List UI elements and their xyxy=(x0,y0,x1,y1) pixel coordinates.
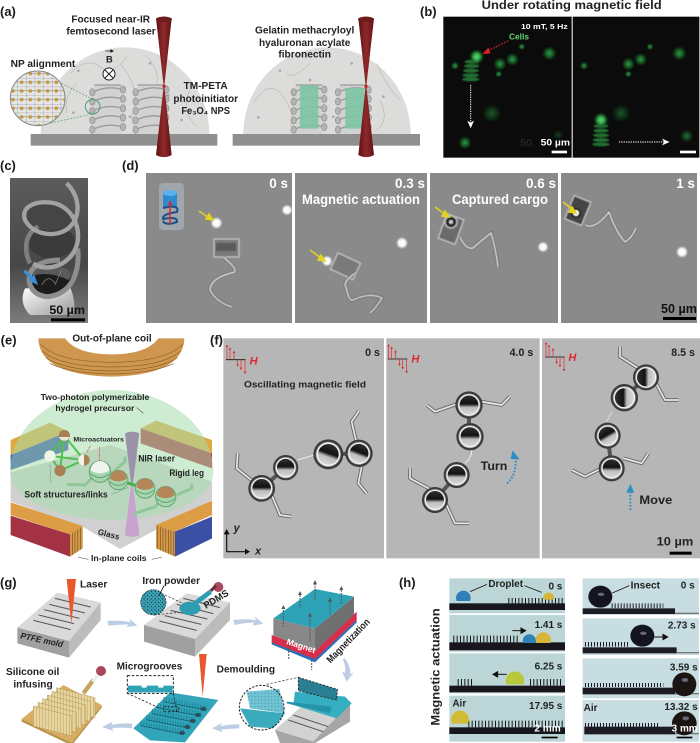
flow arrow 2 xyxy=(233,616,263,626)
microgrooved plate xyxy=(133,692,218,742)
glass slide xyxy=(11,445,212,549)
PTFE mold label: PTFE mold xyxy=(20,631,65,649)
fluorescence frame 1 xyxy=(443,17,572,158)
white direction arrow down xyxy=(467,85,474,128)
panel: (g) fabrication of microgroove surface xyxy=(0,575,373,743)
xy axes: y xyxy=(233,523,241,535)
right base plate xyxy=(233,134,420,146)
microgrooves label: Microgrooves xyxy=(117,661,183,672)
captured cargo caption: Captured cargo xyxy=(452,192,548,207)
panel label g: (g) xyxy=(0,575,17,590)
frame 0.3 s xyxy=(295,173,427,323)
insect frame 2 xyxy=(583,618,699,655)
frame 1 s xyxy=(561,173,697,323)
hydrogel composition caption: fibronectin xyxy=(278,50,331,61)
time stamps insect: 13.32 s xyxy=(664,702,698,713)
scale label: 50 µm xyxy=(661,301,697,316)
panel label d: (d) xyxy=(122,158,139,173)
frame 0 s xyxy=(223,338,384,558)
white direction arrow right xyxy=(619,139,670,145)
time stamps xyxy=(269,176,695,191)
microactuators label: Microactuators xyxy=(73,437,124,444)
panel: (f) micrographs under oscillating field xyxy=(210,333,700,558)
scale labels: 2 mm xyxy=(534,724,561,735)
in-plane coil back-right xyxy=(141,421,212,468)
second mold block xyxy=(144,593,230,657)
laser beam, first stage xyxy=(156,17,172,157)
droplet frame 3 xyxy=(449,653,565,693)
scale bar xyxy=(670,552,692,555)
green hydrogel precursor dome xyxy=(10,390,213,520)
scale bar xyxy=(51,318,85,321)
scale labels xyxy=(534,724,698,735)
helix inset icon xyxy=(159,183,184,230)
second laser cone xyxy=(199,654,207,697)
helical scaffolds with cell-laden hydrogel xyxy=(291,85,371,134)
move arrow xyxy=(626,484,634,510)
rigid legs xyxy=(67,457,192,514)
hydrogel composition caption xyxy=(255,25,355,61)
magnetic actuation caption: Magnetic actuation xyxy=(302,192,420,207)
hydrogel label: Two-photon polymerizable xyxy=(41,392,150,402)
time stamps: 0 s xyxy=(365,347,380,359)
scale label: 10 µm xyxy=(657,535,693,548)
helical scaffolds, first stage xyxy=(90,85,169,134)
time stamps: 0.6 s xyxy=(526,176,556,191)
time stamps droplet: 6.25 s xyxy=(535,662,563,673)
laser caption: femtosecond laser xyxy=(66,27,156,38)
xy axes xyxy=(224,523,262,557)
scale label: 50 µm xyxy=(49,303,85,317)
hydrogel composition caption: hyaluronan acylate xyxy=(259,38,351,49)
scale labels xyxy=(520,138,570,150)
arrowheads xyxy=(281,580,343,617)
scale bar 2 xyxy=(680,151,696,153)
time stamps insect xyxy=(664,581,698,713)
panel label h: (h) xyxy=(399,575,416,590)
panel label c: (c) xyxy=(0,158,16,173)
tetrahedral soft structure xyxy=(44,430,90,476)
scale bar 1 xyxy=(552,151,567,153)
NIR laser cone xyxy=(125,432,139,537)
in-plane coils label: In-plane coils xyxy=(91,553,147,563)
time stamps: 0.3 s xyxy=(395,176,425,191)
in-plane coil back-left xyxy=(11,423,68,470)
panel: (a) laser fabrication of helical scaffolds xyxy=(0,4,420,157)
time stamps: 8.5 s xyxy=(671,347,695,359)
red arrow to cells xyxy=(482,41,508,54)
silicone oil label: infusing xyxy=(13,679,53,690)
time stamps: 4.0 s xyxy=(510,347,533,359)
fluorescence frame 2 xyxy=(573,17,699,158)
insect frame 4 xyxy=(583,700,699,742)
hydrogel composition caption: Gelatin methacryloyl xyxy=(255,25,355,36)
frame 8.5 s xyxy=(542,338,700,558)
side title: Magnetic actuation xyxy=(428,608,442,726)
demoulding block xyxy=(275,677,352,743)
out-of-plane coil xyxy=(38,338,184,377)
scale bars xyxy=(542,737,692,738)
droplet frame 4 xyxy=(449,696,565,742)
laser caption xyxy=(66,15,156,38)
time stamps droplet: 1.41 s xyxy=(535,620,563,631)
insect frame 3 xyxy=(583,658,699,698)
droplet label with pointers xyxy=(470,579,542,592)
panel: (c) SEM image of helix xyxy=(0,158,88,323)
laser cone xyxy=(67,579,76,623)
frame 4.0 s xyxy=(386,338,540,558)
laser label: Laser xyxy=(80,580,107,591)
field symbols H: H xyxy=(568,352,577,364)
microgroove section inset xyxy=(127,676,178,712)
time stamps xyxy=(365,347,695,359)
demoulding label: Demoulding xyxy=(217,665,275,676)
cells label: Cells xyxy=(509,31,529,41)
panel label a: (a) xyxy=(0,4,16,19)
panel: (d) magnetic actuation and cargo capture xyxy=(122,158,697,323)
left hydrogel dome xyxy=(41,47,209,134)
scale labels: 50 xyxy=(520,138,532,150)
field symbols H xyxy=(226,342,577,374)
laser caption: Focused near-IR xyxy=(71,15,150,26)
laser beam, second stage xyxy=(358,17,374,157)
insect label with pointer xyxy=(612,581,661,593)
magnetic field symbol: B xyxy=(106,55,113,65)
air labels: Air xyxy=(452,698,466,709)
turn arrow xyxy=(507,450,520,483)
droplet frame 1 xyxy=(449,578,565,613)
turn label: Turn xyxy=(481,459,507,473)
xy axes: x xyxy=(254,545,262,557)
panel label f: (f) xyxy=(210,333,223,348)
move label: Move xyxy=(639,493,673,507)
silicone oil dropper xyxy=(83,666,106,693)
SEM image xyxy=(10,178,88,323)
magnetic field symbol xyxy=(103,50,115,80)
oscillating field caption: Oscillating magnetic field xyxy=(244,379,366,389)
iron powder inset xyxy=(141,586,187,615)
red dashed arrows xyxy=(87,446,99,461)
frame 0.6 s xyxy=(430,173,558,323)
yellow arrows to cargo xyxy=(199,202,576,261)
hydrogel label xyxy=(41,392,150,413)
field symbols H: H xyxy=(250,356,259,368)
material label xyxy=(173,81,238,117)
magnetization block xyxy=(272,589,357,662)
material label: TM-PETA xyxy=(184,81,228,92)
soft structures label: Soft structures/links xyxy=(24,489,108,499)
time stamps: 1 s xyxy=(676,176,695,191)
hydrogel label: hydrogel precursor xyxy=(55,403,135,413)
PTFE mold block xyxy=(17,593,101,658)
silicone oil label: Silicone oil xyxy=(6,667,60,678)
in-plane coil front-right xyxy=(156,501,212,557)
scale bar xyxy=(663,317,696,320)
silicone oil label xyxy=(6,667,60,690)
flow arrow 5 xyxy=(102,722,132,731)
lubricated fin structure xyxy=(22,685,102,743)
flow arrow 3 xyxy=(342,658,354,682)
insect label with pointer: Insect xyxy=(631,581,661,592)
frame 0 s xyxy=(146,173,292,323)
motion arrows xyxy=(493,628,668,677)
NIR laser label: NIR laser xyxy=(138,454,175,464)
panel label e: (e) xyxy=(1,333,17,348)
flow arrow 4 xyxy=(212,723,239,732)
PDMS label: PDMS xyxy=(202,588,231,612)
droplet label with pointers: Droplet xyxy=(488,579,524,590)
PDMS dropper xyxy=(179,582,223,615)
material label: photoinitiator xyxy=(173,94,238,105)
air labels xyxy=(452,698,598,714)
time stamps droplet: 17.95 s xyxy=(529,701,563,712)
glass label: Glass xyxy=(97,527,121,542)
magnetization arrows xyxy=(283,583,341,670)
left base plate xyxy=(31,134,217,146)
nanoparticle alignment inset xyxy=(10,71,100,126)
time stamps: 0 s xyxy=(269,176,288,191)
time stamps droplet xyxy=(529,582,563,712)
panel: (b) fluorescence under rotating magnetic field xyxy=(420,0,699,158)
flow arrow 1 xyxy=(107,618,137,627)
panel label b: (b) xyxy=(420,4,437,19)
iron powder label: Iron powder xyxy=(142,576,200,587)
time stamps insect: 0 s xyxy=(681,581,695,592)
time stamps droplet: 0 s xyxy=(548,582,563,593)
droplet frame 2 xyxy=(449,615,565,652)
scale labels: 3 mm xyxy=(672,724,698,735)
time stamps insect: 2.73 s xyxy=(668,621,696,632)
scale labels: 50 µm xyxy=(541,138,570,148)
microactuator chain xyxy=(89,461,176,507)
air labels: Air xyxy=(584,703,598,714)
panel: (h) droplet and insect actuation xyxy=(399,575,699,742)
NP alignment label: NP alignment xyxy=(11,59,76,70)
material label: Fe₃O₄ NPS xyxy=(181,106,230,117)
green dashed pointers xyxy=(50,465,128,494)
right hydrogel dome xyxy=(243,47,411,134)
magnetization label: Magnetization xyxy=(325,617,373,666)
demoulding inset xyxy=(239,677,298,730)
field symbols H: H xyxy=(411,354,420,366)
time stamps insect: 3.59 s xyxy=(670,662,698,673)
field condition label: 10 mT, 5 Hz xyxy=(521,22,568,31)
out-of-plane coil label: Out-of-plane coil xyxy=(72,334,152,345)
blue arrow xyxy=(24,271,38,285)
insect frame 1 xyxy=(583,578,699,615)
in-plane coil front-left xyxy=(11,502,83,557)
rigid leg label: Rigid leg xyxy=(169,468,204,478)
magnet label: Magnet xyxy=(285,636,317,655)
panel: (e) two-photon fabrication setup with coils xyxy=(1,333,213,563)
